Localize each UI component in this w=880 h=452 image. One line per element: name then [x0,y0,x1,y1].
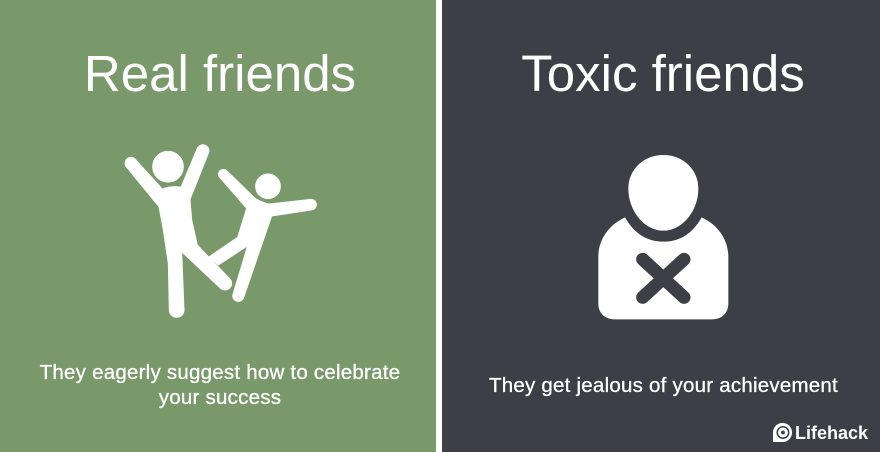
logo: Lifehack: Lifehack [795,423,868,443]
panel: toxic friends [442,0,880,452]
text: toxic friends caption: They get jealous of your achievement [489,374,838,397]
icon: two people jumping [124,144,317,318]
heading: real friends: Real friends [84,45,356,102]
icon: person with cross [598,155,728,320]
panel: real friends [0,0,436,452]
heading: toxic friends: Toxic friends [521,45,805,102]
text: real friends caption [40,361,400,409]
text: real friends caption: your success [159,386,281,409]
text: real friends caption: They eagerly suggest how to celebrate [40,361,400,384]
